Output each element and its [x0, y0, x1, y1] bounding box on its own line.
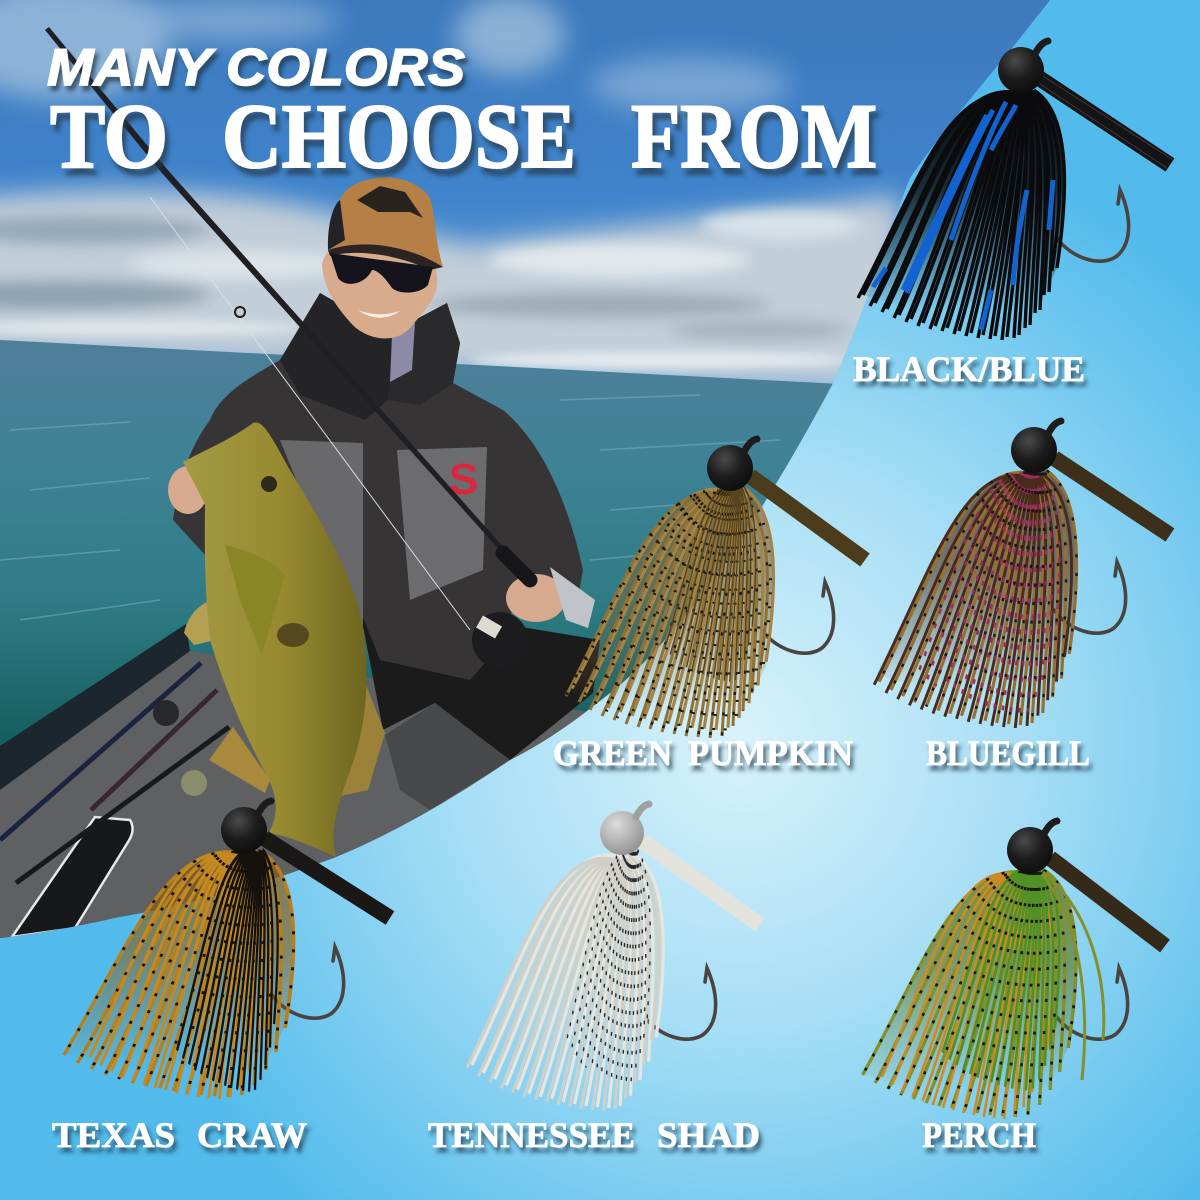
- smile: [358, 310, 400, 318]
- title line 2: TO: [50, 85, 168, 187]
- rods on deck: [0, 663, 229, 883]
- boat deck: [0, 651, 586, 938]
- fin bottom left: [209, 727, 270, 793]
- left hand: [168, 466, 208, 514]
- cap: [328, 177, 443, 267]
- glove: [550, 567, 595, 628]
- fish body: [183, 423, 367, 857]
- face: [322, 237, 437, 338]
- lure: green pumpkin: [566, 439, 865, 738]
- label: texas craw: CRAW: [197, 1115, 307, 1155]
- label: perch: PERCH: [922, 1115, 1036, 1155]
- fishing rod: [45, 27, 506, 554]
- right hand: [506, 574, 566, 622]
- fish mark: [277, 623, 309, 647]
- label: bluegill: BLUEGILL: [926, 733, 1090, 773]
- fishing photo panel: [0, 0, 1050, 938]
- label: green pumpkin: GREEN: [553, 733, 672, 773]
- label: texas craw: TEXAS: [52, 1115, 175, 1155]
- fish gill: [225, 545, 285, 655]
- cap logo: [357, 186, 423, 218]
- label: green pumpkin: PUMPKIN: [688, 733, 853, 773]
- fishing line: [150, 197, 470, 630]
- label: green pumpkin: [553, 733, 853, 773]
- blue strands: [873, 102, 1053, 330]
- water ripples: [0, 395, 780, 620]
- jacket logo: S: [449, 455, 478, 504]
- angler: [168, 177, 600, 760]
- deck shadow: [385, 703, 510, 810]
- right outer strands: [1042, 872, 1104, 1080]
- cap brim underside: [328, 244, 443, 270]
- boat logo: [12, 817, 133, 937]
- sunglasses: [330, 253, 433, 293]
- label: tennessee shad: SHAD: [657, 1115, 760, 1155]
- scarf: [390, 322, 415, 382]
- label: tennessee shad: [428, 1115, 760, 1155]
- lake water: [0, 340, 840, 960]
- label: texas craw: [52, 1115, 307, 1155]
- label: tennessee shad: TENNESSEE: [428, 1115, 635, 1155]
- lure: black/blue: [858, 41, 1173, 340]
- jacket grey panel left: [280, 440, 363, 640]
- title: [47, 39, 877, 187]
- boat gunwale: [0, 624, 190, 790]
- pants: [363, 618, 600, 760]
- title line 2: [50, 85, 877, 187]
- hood right: [388, 303, 460, 405]
- reel: [472, 612, 525, 663]
- fin right: [342, 686, 385, 796]
- rod handle: [503, 553, 530, 580]
- smallmouth bass: [183, 423, 385, 857]
- title line 2: CHOOSE: [222, 85, 576, 187]
- rod guide: [235, 307, 245, 317]
- clouds: [0, 0, 900, 390]
- hood: [280, 293, 392, 420]
- sky: [0, 0, 1050, 390]
- fish eye: [261, 476, 277, 492]
- fin top left: [184, 602, 211, 645]
- jacket: [173, 293, 583, 680]
- lure: bluegill: [874, 421, 1170, 728]
- label: black/blue: BLACK/BLUE: [853, 349, 1085, 389]
- lure: tennessee shad: [467, 804, 760, 1111]
- jacket grey panel right: [397, 447, 487, 600]
- cap mesh: [328, 200, 345, 250]
- lure: perch: [863, 821, 1165, 1119]
- title line 2: FROM: [631, 85, 877, 187]
- title line 1: MANY COLORS: [47, 39, 465, 97]
- lure: texas craw: [64, 801, 390, 1099]
